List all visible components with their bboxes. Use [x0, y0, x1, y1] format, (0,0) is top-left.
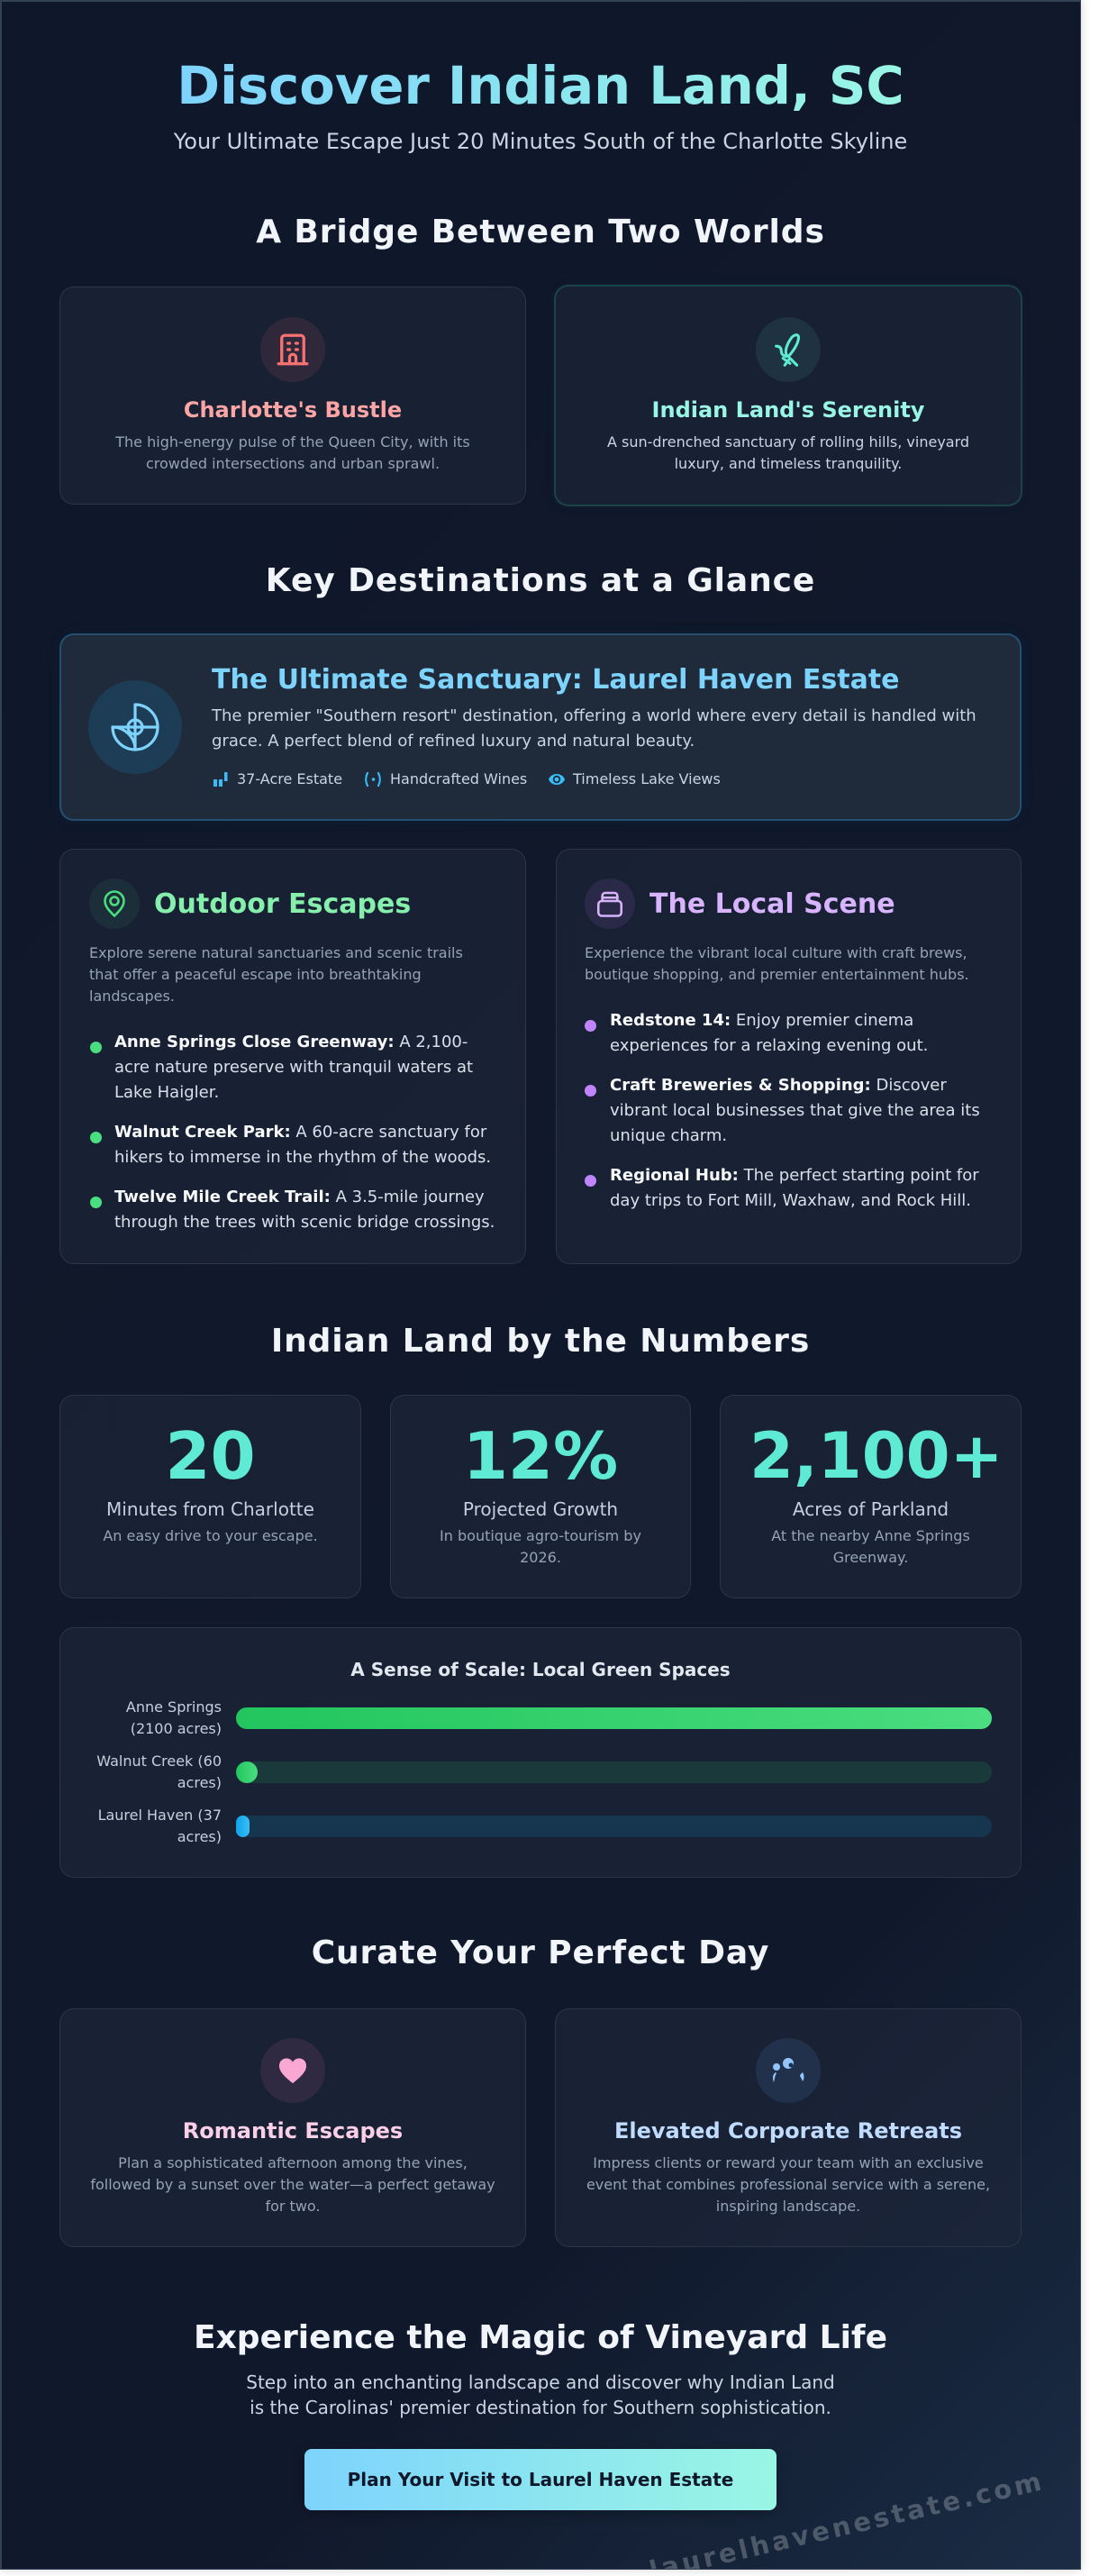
stat number: 20	[165, 1418, 256, 1494]
feature text	[211, 706, 976, 751]
bar label: Walnut Creek: acres)	[177, 1774, 222, 1791]
bullet text: Craft Breweries & Shopping: Discover	[610, 1076, 947, 1095]
tag text: Handcrafted Wines	[390, 770, 527, 787]
panel: Charlotte's Bustle	[59, 287, 526, 505]
bullet: Walnut Creek	[90, 1123, 491, 1167]
heading: Experience the Magic of Vineyard Life: Experience the Magic of Vineyard Life	[194, 2319, 887, 2356]
bar label: Anne Springs: (2100 acres)	[131, 1720, 222, 1737]
bar fill	[236, 1816, 250, 1837]
feature tag: acreage	[213, 770, 342, 787]
bar: Laurel Haven	[236, 1816, 992, 1837]
bar label: Laurel Haven: acres)	[177, 1828, 222, 1845]
icon: group of people	[756, 2038, 821, 2103]
stat number: 2,100+	[749, 1419, 1004, 1493]
card heading: Romantic Escapes	[183, 2118, 403, 2144]
call-to-action button	[304, 2449, 777, 2510]
bar label: Anne Springs: Anne Springs	[126, 1698, 222, 1716]
call-to-action button: Plan Your Visit to Laurel Haven Estate	[348, 2469, 733, 2490]
panel: Romantic Escapes	[59, 2008, 526, 2247]
card text: event that combines professional service with a serene,	[586, 2176, 990, 2193]
card text	[90, 2154, 495, 2215]
card text: followed by a sunset over the water—a perfect getaway	[90, 2176, 495, 2193]
feature heading: The Ultimate Sanctuary: Laurel Haven Estate	[212, 664, 900, 696]
bullet dot	[585, 1175, 596, 1187]
stat label: Projected Growth	[463, 1498, 618, 1520]
bar label: Anne Springs	[126, 1698, 222, 1737]
bar label: Laurel Haven	[98, 1807, 222, 1845]
panel intro: that offer a peaceful escape into breathtaking	[89, 966, 422, 983]
bullet dot	[90, 1197, 102, 1208]
icon: eye	[549, 774, 565, 785]
bullet text	[114, 1123, 491, 1167]
card text: A sun-drenched sanctuary of rolling hills, vineyard	[607, 433, 969, 451]
bullet: Craft Breweries	[585, 1076, 980, 1145]
panel: bar chart of local green spaces	[59, 1627, 1022, 1878]
bullet text: hikers to immerse in the rhythm of the woods.	[114, 1148, 491, 1167]
card heading: Charlotte's Bustle	[184, 397, 402, 423]
icon: bars	[213, 772, 227, 787]
panel heading: Outdoor Escapes	[154, 888, 411, 920]
closing text: Step into an enchanting landscape and discover why Indian Land	[246, 2371, 835, 2393]
panel intro	[89, 944, 463, 1005]
bullet dot	[90, 1042, 102, 1053]
panel intro: Explore serene natural sanctuaries and scenic trails	[89, 944, 463, 961]
bullet dot	[90, 1132, 102, 1143]
chart title: A Sense of Scale: Local Green Spaces	[350, 1659, 731, 1680]
icon: signal	[365, 771, 381, 787]
feature text: The premier "Southern resort" destination, offering a world where every detail is handled with	[212, 706, 976, 725]
panel intro	[585, 944, 969, 983]
bullet dot	[585, 1085, 596, 1097]
closing text: is the Carolinas' premier destination for Southern sophistication.	[250, 2397, 831, 2418]
bullet text: unique charm.	[610, 1126, 727, 1145]
bullet text: through the trees with scenic bridge crossings.	[114, 1213, 495, 1232]
stat number: 12%	[463, 1418, 618, 1494]
heading: A Bridge Between Two Worlds: A Bridge Between Two Worlds	[256, 214, 825, 250]
card text: The high-energy pulse of the Queen City, with its	[115, 433, 470, 451]
bullet text: Regional Hub: The perfect starting point for	[610, 1166, 979, 1185]
icon: shopping bag	[585, 878, 635, 929]
card text	[115, 433, 470, 472]
heading: Curate Your Perfect Day: Curate Your Perfect Day	[312, 1934, 769, 1971]
stat label: Minutes from Charlotte	[106, 1498, 314, 1520]
feature text: grace. A perfect blend of refined luxury and natural beauty.	[212, 732, 695, 751]
bullet text: day trips to Fort Mill, Waxhaw, and Rock Hill.	[610, 1191, 971, 1210]
panel: stat 20 minutes	[59, 1395, 361, 1598]
tag text: Timeless Lake Views	[573, 770, 721, 787]
bullet: Redstone 14	[585, 1011, 928, 1055]
panel intro: landscapes.	[89, 988, 175, 1005]
card text: for two.	[265, 2198, 321, 2215]
panel intro: boutique shopping, and premier entertainment hubs.	[585, 966, 969, 983]
icon: vineyard compass	[88, 680, 182, 774]
stat note: An easy drive to your escape.	[103, 1527, 318, 1544]
bullet text: Lake Haigler.	[114, 1083, 219, 1102]
stat note: Greenway.	[833, 1549, 908, 1566]
icon: building	[260, 317, 325, 382]
stat note: At the nearby Anne Springs	[771, 1527, 970, 1544]
card text: inspiring landscape.	[716, 2198, 860, 2215]
bar label: Laurel Haven: Laurel Haven (37	[98, 1807, 222, 1824]
panel: Laurel Haven Estate feature	[59, 633, 1022, 821]
feature tag: wines	[365, 770, 527, 787]
bullet: Anne Springs	[90, 1033, 473, 1102]
panel intro: Experience the vibrant local culture with craft brews,	[585, 944, 967, 961]
bullet: Regional Hub	[585, 1166, 979, 1210]
bullet text	[114, 1033, 473, 1102]
icon: heart	[260, 2038, 325, 2103]
stat label: Acres of Parkland	[793, 1498, 949, 1520]
panel: stat 2,100+	[720, 1395, 1022, 1598]
icon: map pin	[89, 878, 140, 929]
stat note	[771, 1527, 970, 1566]
bullet text: experiences for a relaxing evening out.	[610, 1036, 928, 1055]
card heading: Indian Land's Serenity	[652, 397, 924, 423]
tag text: 37-Acre Estate	[237, 770, 342, 787]
panel: stat 12%	[390, 1395, 691, 1598]
panel: Outdoor Escapes	[59, 849, 526, 1264]
icon: vine	[756, 317, 821, 382]
panel heading: The Local Scene	[649, 888, 895, 920]
bullet text	[610, 1166, 979, 1210]
title: Discover Indian Land, SC	[177, 56, 904, 116]
bullet text: Anne Springs Close Greenway: A 2,100-	[114, 1033, 468, 1051]
bullet text: Walnut Creek Park: A 60-acre sanctuary for	[114, 1123, 486, 1142]
panel: Elevated Corporate Retreats	[555, 2008, 1022, 2247]
closing text	[246, 2371, 835, 2418]
bar fill	[236, 1707, 992, 1729]
bar label: Walnut Creek	[96, 1752, 222, 1791]
card text	[586, 2154, 990, 2215]
bar: Walnut Creek	[236, 1761, 992, 1783]
card text	[607, 433, 969, 472]
stat note: 2026.	[520, 1549, 561, 1566]
heading: Key Destinations at a Glance: Key Destinations at a Glance	[266, 562, 815, 599]
bullet dot	[585, 1020, 596, 1032]
bar fill	[236, 1761, 258, 1783]
card text: Impress clients or reward your team with an exclusive	[593, 2154, 984, 2171]
bar label: Walnut Creek: Walnut Creek (60	[96, 1752, 222, 1770]
bullet text: Redstone 14: Enjoy premier cinema	[610, 1011, 913, 1030]
panel: Indian Land's Serenity	[554, 285, 1022, 506]
bullet text: acre nature preserve with tranquil waters at	[114, 1058, 473, 1077]
bullet text	[610, 1011, 928, 1055]
feature tag: lake views	[549, 770, 721, 787]
bullet text: Twelve Mile Creek Trail: A 3.5-mile journey	[114, 1188, 485, 1206]
card text: luxury, and timeless tranquility.	[675, 455, 902, 472]
subtitle: Your Ultimate Escape Just 20 Minutes South of the Charlotte Skyline	[174, 129, 907, 154]
card heading: Elevated Corporate Retreats	[614, 2118, 962, 2144]
bullet: Twelve Mile Creek	[90, 1188, 495, 1232]
panel: The Local Scene	[556, 849, 1022, 1264]
bullet text	[114, 1188, 495, 1232]
heading: Indian Land by the Numbers: Indian Land by the Numbers	[271, 1323, 810, 1360]
card text: crowded intersections and urban sprawl.	[146, 455, 440, 472]
stat note	[440, 1527, 641, 1566]
card text: Plan a sophisticated afternoon among the vines,	[118, 2154, 468, 2171]
stat note: In boutique agro-tourism by	[440, 1527, 641, 1544]
bullet text: vibrant local businesses that give the area its	[610, 1101, 980, 1120]
bar: Anne Springs	[236, 1707, 992, 1729]
bullet text	[610, 1076, 980, 1145]
